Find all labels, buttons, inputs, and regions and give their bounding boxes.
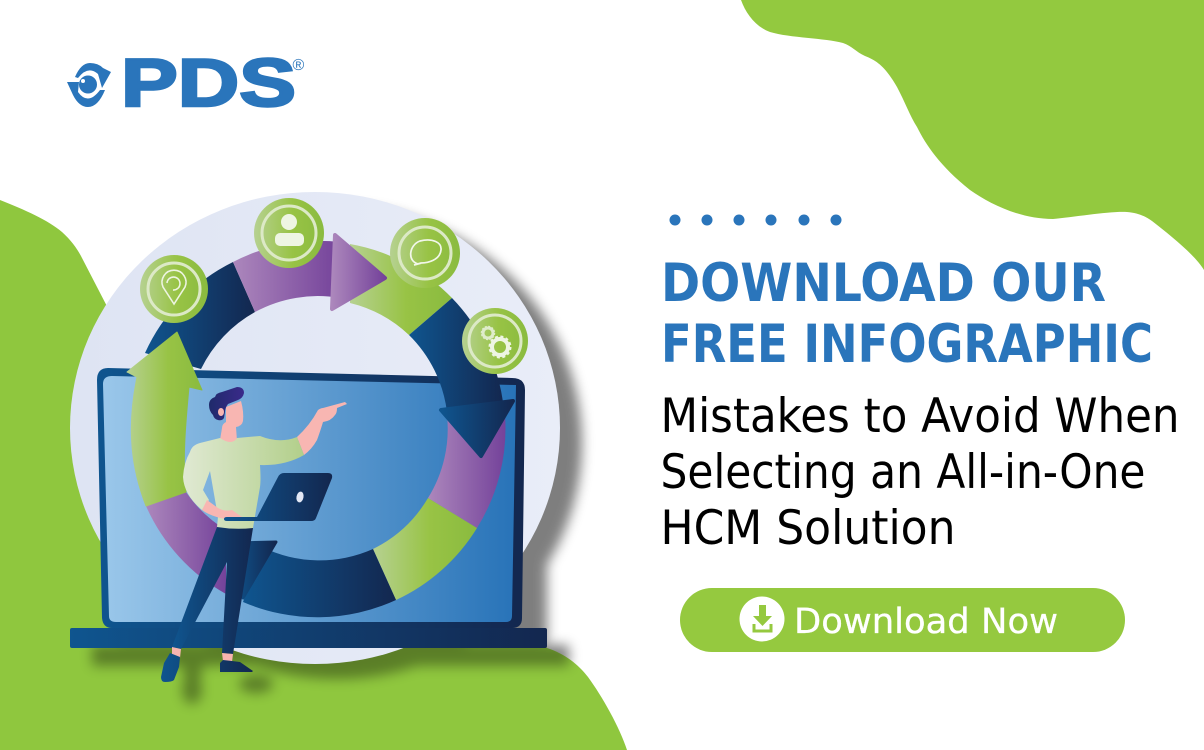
green blob: bottom left — [0, 200, 627, 750]
logo: PDS — [67, 45, 304, 121]
small laptop — [224, 473, 332, 521]
subtitle — [660, 389, 1180, 556]
subtitle: Mistakes to Avoid When — [660, 389, 1180, 444]
download button — [680, 588, 1125, 652]
icon: speech bubble — [390, 218, 460, 288]
segment: navy bottom — [243, 547, 396, 617]
sweater — [183, 436, 304, 529]
pointing arm — [297, 402, 347, 455]
pale background circle — [70, 192, 560, 664]
segment: purple top — [233, 241, 340, 312]
hand on hip — [202, 500, 242, 519]
segment: green top right — [350, 244, 452, 335]
soft shadow on white — [92, 207, 582, 704]
segment: green bottom right — [373, 498, 477, 600]
laptop frame — [97, 368, 525, 628]
logo: registered mark: ® — [292, 57, 304, 74]
circular arrow ring — [127, 235, 513, 617]
decorative dots — [670, 214, 842, 226]
icon: location pin — [140, 255, 208, 323]
icon: download — [740, 596, 784, 642]
green blob: top right — [741, 0, 1204, 270]
ear — [218, 408, 224, 416]
arrow head: navy bottom — [232, 542, 276, 598]
soft shadow on green — [86, 648, 574, 709]
person pointing — [161, 387, 347, 682]
heading: DOWNLOAD OUR — [661, 253, 1106, 314]
green arrow: shaft and head — [127, 332, 202, 506]
laptop — [70, 368, 547, 648]
neck and face — [220, 401, 243, 443]
legs — [172, 527, 253, 654]
button label: Download Now — [794, 602, 1058, 642]
shoes — [161, 653, 253, 682]
segment: navy right — [409, 298, 503, 412]
laptop base — [70, 628, 547, 648]
subtitle: Selecting an All-in-One — [660, 445, 1146, 500]
subtitle: HCM Solution — [660, 501, 956, 556]
laptop screen — [103, 376, 516, 622]
hair — [209, 387, 244, 420]
small laptop logo — [295, 491, 305, 503]
segment: navy top left — [145, 262, 255, 369]
logo: wordmark: PDS — [121, 45, 296, 121]
icon: person — [254, 198, 324, 268]
arrow head: navy right — [441, 401, 513, 456]
icon: gears — [462, 308, 528, 374]
logo: eye icon — [67, 63, 111, 107]
segment: purple bottom left — [146, 492, 226, 594]
ankles — [172, 647, 233, 662]
arrow head: purple — [332, 235, 385, 309]
segment: purple right — [428, 415, 505, 528]
heading — [661, 253, 1153, 375]
